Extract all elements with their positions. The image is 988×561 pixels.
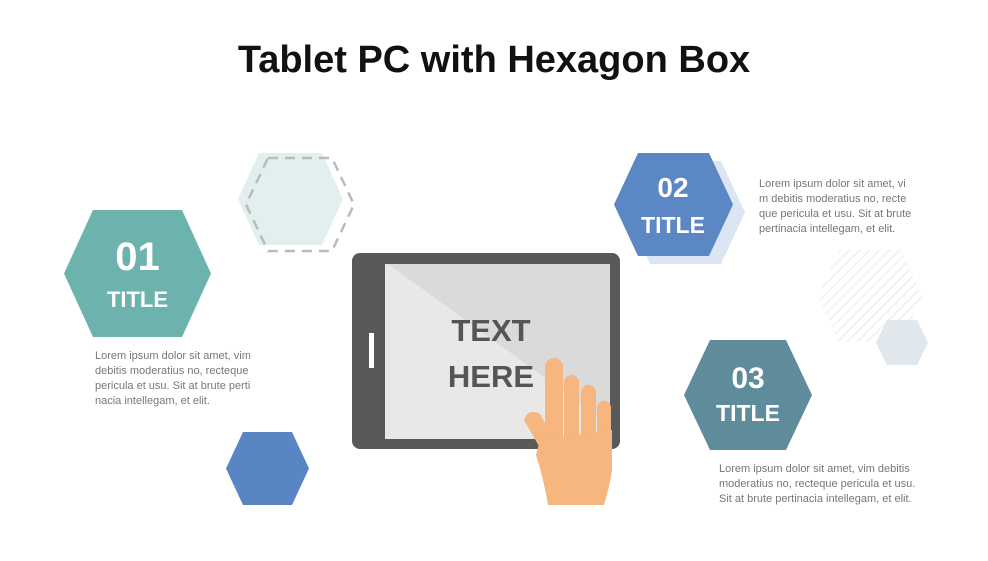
hexagon 02: 02 — [657, 172, 689, 203]
hexagon 01: 01 — [115, 235, 160, 279]
icon: hand — [524, 358, 612, 505]
text block 02: pertinacia intellegam, et elit. — [759, 223, 895, 235]
decorative blue hexagon — [226, 432, 309, 505]
text block 03: moderatius no, recteque pericula et usu. — [719, 478, 915, 490]
hexagon 01: TITLE — [107, 287, 168, 312]
text block 01: pericula et usu. Sit at brute perti — [95, 380, 250, 392]
decorative striped hexagons — [818, 250, 928, 365]
hexagon 02: TITLE — [641, 212, 705, 238]
title: Tablet PC with Hexagon Box — [238, 39, 750, 81]
text block 03: Lorem ipsum dolor sit amet, vim debitis — [719, 463, 910, 475]
hexagon 03: TITLE — [716, 400, 780, 426]
text block 01: Lorem ipsum dolor sit amet, vim — [95, 350, 251, 362]
tablet — [352, 253, 620, 449]
decorative dashed hexagon — [238, 153, 354, 251]
text block 02: que pericula et usu. Sit at brute — [759, 208, 911, 220]
text block 03: Sit at brute pertinacia intellegam, et elit. — [719, 493, 912, 505]
text block 02: Lorem ipsum dolor sit amet, vi — [759, 178, 906, 190]
tablet: HERE — [448, 359, 534, 394]
text block 02: m debitis moderatius no, recte — [759, 193, 906, 205]
hexagon 03: 03 — [731, 362, 765, 395]
text block 01: nacia intellegam, et elit. — [95, 395, 210, 407]
hexagon 01 — [64, 210, 211, 337]
hexagon 03 — [684, 340, 812, 450]
hexagon 02 — [614, 153, 745, 264]
text block 01: debitis moderatius no, recteque — [95, 365, 248, 377]
tablet: TEXT — [451, 313, 531, 348]
